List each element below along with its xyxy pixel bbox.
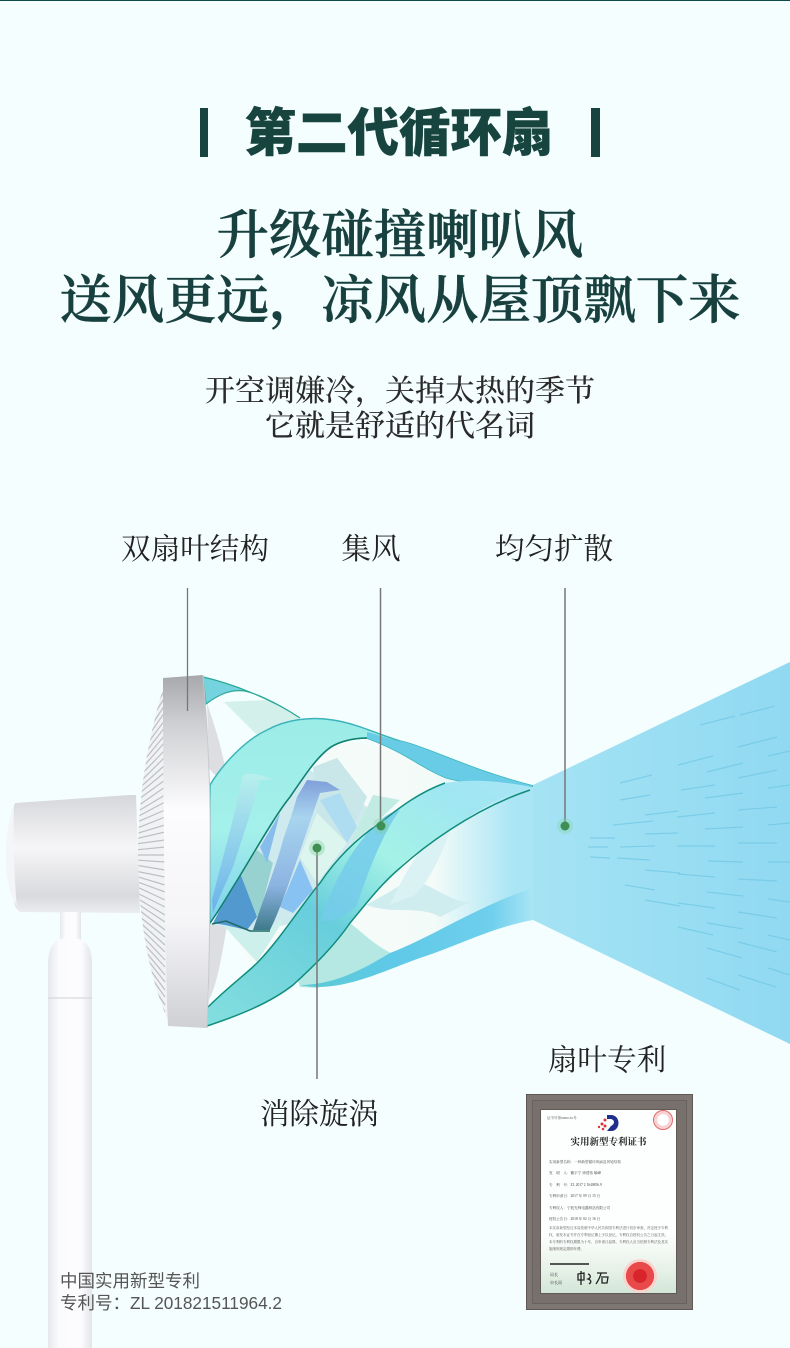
white interior of airflow (225, 743, 533, 985)
certificate seal (623, 1259, 657, 1293)
certificate body text: 本实用新型经过本局依照中华人民共和国专利法进行初步审查，决定授予专利权，颁发本证书并在专利登记簿上予以登记。专利权自授权公告之日起生效。本专利的专利权期限为十年，自申请日起算。专利权人应当依照专利法及其实施细则规定缴纳年费。 (549, 1226, 668, 1251)
ribbon: large arc (210, 718, 533, 923)
ribbon: main band edges (207, 783, 530, 1026)
ribbon: arc right narrow section (367, 732, 533, 787)
fan motor body (6, 795, 140, 913)
certificate details: 实用新型名称：一种新型循环风扇及风轮结构 (549, 1160, 621, 1164)
pole seam (48, 997, 92, 999)
patent note: 中国实用新型专利 (60, 1271, 200, 1291)
label: even spread: 均匀扩散 (495, 534, 613, 566)
ribbon: main rising band (207, 781, 533, 1026)
title (200, 104, 554, 162)
certificate details: 专 利 号：ZL 2017 2 1640856.9 (549, 1183, 602, 1187)
patent note: 专利号：ZL 201821511964.2 (60, 1293, 282, 1313)
certificate details: 授权公告日：2018 年 02 月 16 日 (549, 1217, 600, 1221)
certificate details: 专利权人：宁波先锋电器制造有限公司 (549, 1206, 610, 1210)
inner blue ribbons (212, 780, 340, 931)
title bar right (591, 108, 600, 157)
patent certificate (526, 1094, 693, 1310)
ribbon: blue stripe inside arc (212, 774, 273, 913)
subheading (205, 375, 595, 443)
ribbon: blue stripe inside main (320, 810, 400, 921)
certificate number: 证书号第6960181号 (547, 1116, 577, 1120)
certificate signature label: 局长 (550, 1272, 558, 1277)
patent note (60, 1271, 282, 1313)
ribbon: arc dark inner edge (210, 738, 367, 923)
dark shadow under inner ribbons (212, 921, 270, 931)
certificate signature label: 申长雨 (550, 1280, 562, 1285)
title bar left (200, 108, 208, 157)
headline: 送风更远，凉风从屋顶飘下来 (59, 272, 741, 330)
ribbon: top small (203, 677, 300, 718)
headline (59, 207, 741, 330)
headline: 升级碰撞喇叭风 (217, 207, 583, 265)
airflow cone (480, 662, 790, 1044)
certificate stamp top (653, 1110, 673, 1130)
fan pole (48, 938, 92, 1348)
ribbon: bottom band (300, 888, 533, 987)
certificate black bar (550, 1263, 589, 1265)
certificate details: 专利申请日：2017 年 09 月 15 日 (549, 1194, 600, 1198)
label: gather wind: 集风 (341, 534, 401, 566)
motor end cap (6, 806, 17, 907)
label: eliminate vortex: 消除旋涡 (260, 1099, 378, 1131)
wind streaks (588, 706, 790, 990)
certificate details (549, 1160, 621, 1221)
label: blade patent: 扇叶专利 (548, 1045, 666, 1077)
rim highlight edge (203, 675, 210, 1028)
leader lines and markers (188, 588, 573, 1079)
certificate logo (598, 1115, 618, 1131)
fan rim (163, 675, 210, 1028)
subheading: 开空调嫌冷，关掉太热的季节 (205, 375, 595, 408)
certificate signature (577, 1271, 609, 1285)
certificate paper (541, 1110, 676, 1293)
certificate details: 发 明 人：戴宇宁 徐建伟 喻峰 (549, 1171, 601, 1175)
certificate title: 实用新型专利证书 (570, 1138, 646, 1148)
title text: 第二代循环扇 (244, 104, 554, 162)
subheading: 它就是舒适的代名词 (265, 410, 535, 443)
fan front cage (207, 703, 227, 1000)
fan neck (60, 912, 81, 946)
ribbon: pale lower sheet (297, 923, 400, 988)
illustration: fan and airflow (6, 588, 790, 1348)
fan rear cage (138, 690, 168, 1018)
label: dual blades: 双扇叶结构 (121, 534, 269, 566)
pale back ribbons (213, 700, 470, 962)
certificate signature label (550, 1272, 562, 1285)
